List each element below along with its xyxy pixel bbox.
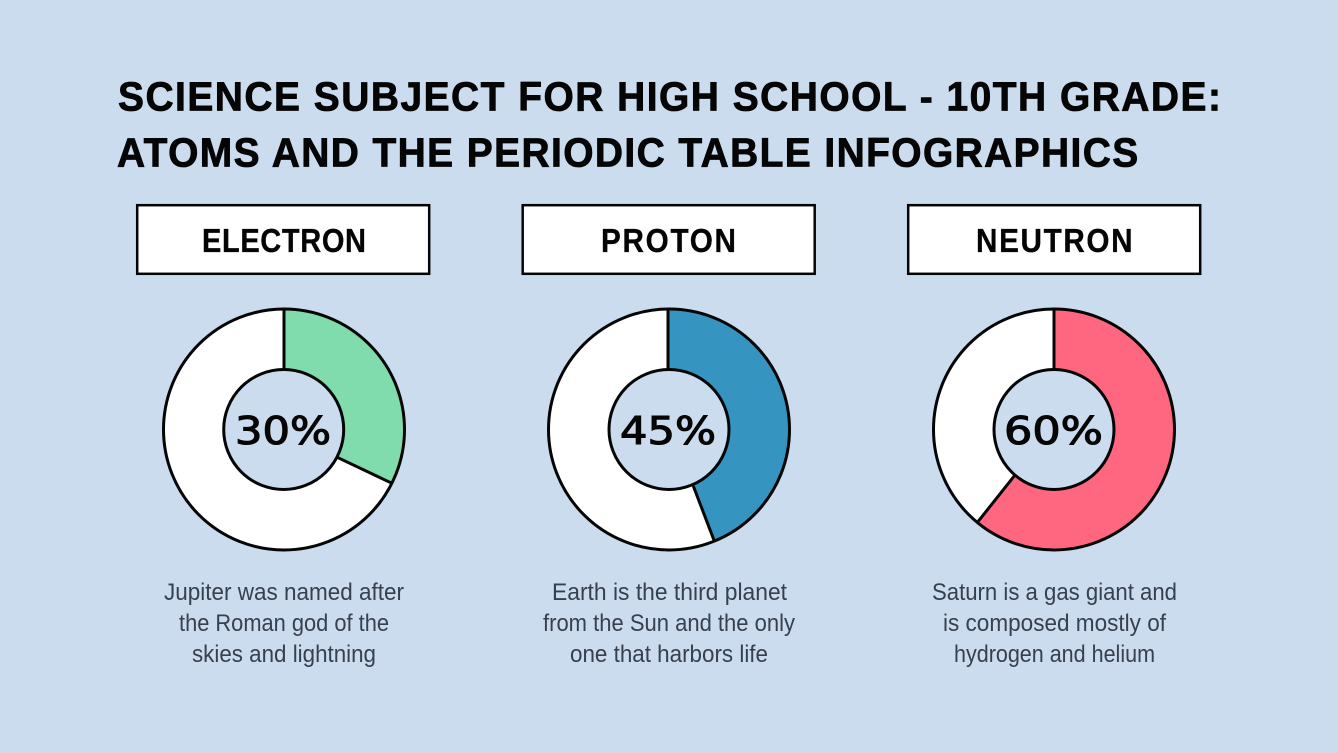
- text: electron description: [164, 579, 404, 668]
- text: neutron description: Saturn is a gas giant and: [932, 579, 1177, 606]
- title: [117, 75, 1221, 176]
- text: proton description: one that harbors life: [570, 641, 768, 668]
- text: proton description: Earth is the third planet: [552, 579, 787, 606]
- heading: proton: PROTON: [601, 223, 736, 259]
- panel: proton: [523, 205, 815, 668]
- panel: electron: [137, 205, 429, 668]
- heading: neutron: NEUTRON: [976, 223, 1133, 259]
- chart: electron donut 30%: 30%: [235, 409, 331, 454]
- chart: neutron donut 60%: 60%: [1004, 409, 1103, 454]
- chart: neutron donut 60%: [934, 309, 1175, 550]
- text: electron description: the Roman god of the: [179, 610, 389, 637]
- text: electron description: skies and lightning: [192, 641, 376, 668]
- text: neutron description: hydrogen and helium: [954, 641, 1155, 668]
- text: proton description: from the Sun and the only: [543, 610, 796, 637]
- heading: electron: [137, 205, 429, 274]
- panel: neutron: [908, 205, 1200, 668]
- title: SCIENCE SUBJECT FOR HIGH SCHOOL - 10TH GRADE:: [118, 75, 1221, 120]
- text: electron description: Jupiter was named after: [164, 579, 404, 606]
- text: proton description: [543, 579, 796, 668]
- chart: electron donut 30%: [164, 309, 404, 550]
- title: ATOMS AND THE PERIODIC TABLE INFOGRAPHICS: [117, 131, 1138, 176]
- chart: proton donut 45%: [548, 309, 790, 550]
- heading: electron: ELECTRON: [202, 222, 366, 259]
- chart: proton donut 45%: 45%: [620, 409, 716, 454]
- heading: proton: [523, 205, 815, 274]
- text: neutron description: is composed mostly of: [943, 610, 1166, 637]
- text: neutron description: [932, 579, 1177, 668]
- heading: neutron: [908, 205, 1200, 274]
